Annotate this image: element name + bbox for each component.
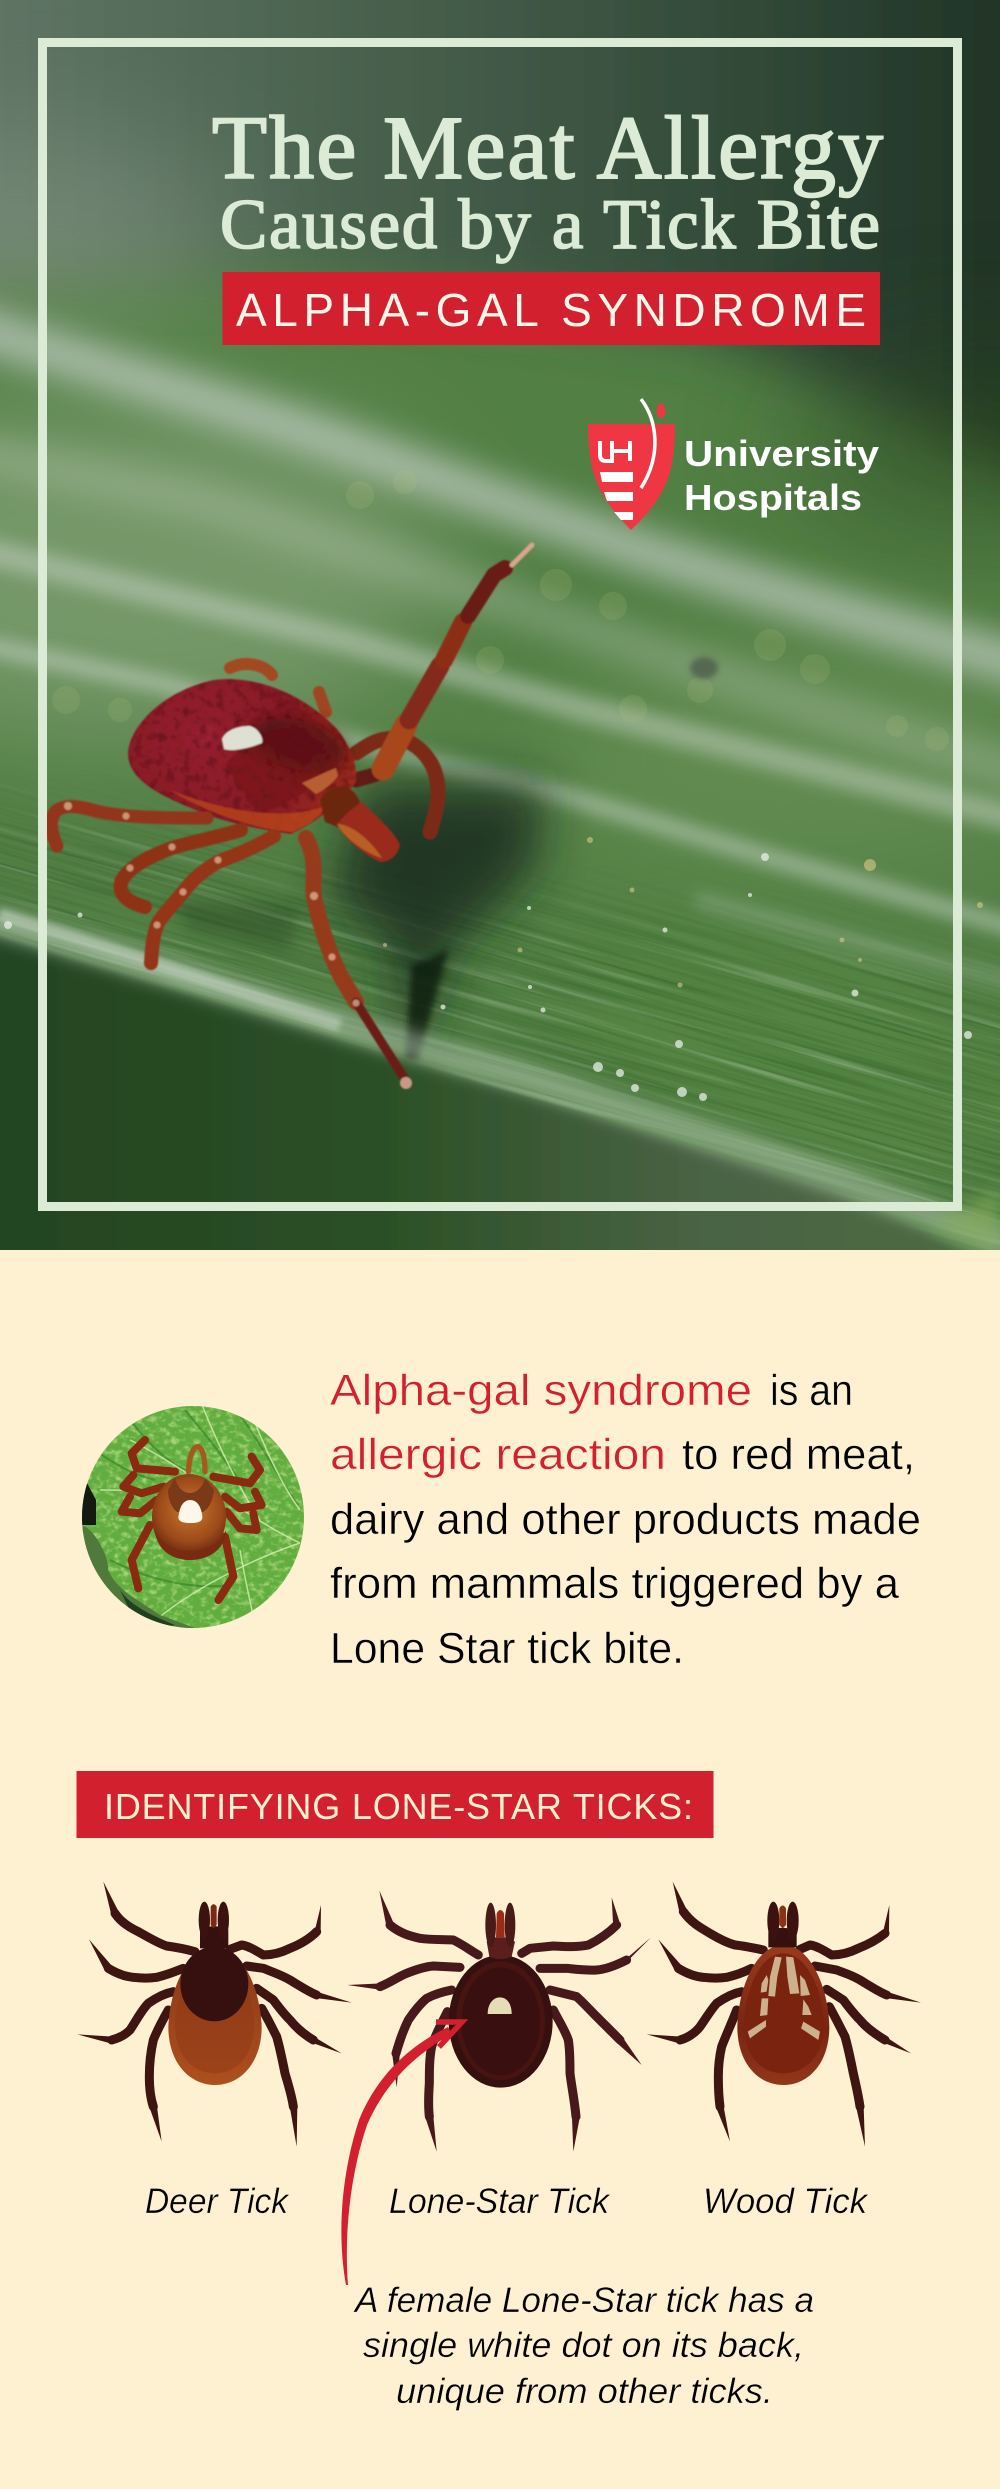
tick body (128, 679, 400, 862)
intro text: Alpha-gal syndrome (330, 1366, 752, 1415)
heading: identifying lone-star ticks: IDENTIFYING LONE-STAR TICKS: (104, 1786, 693, 1827)
callout text: unique from other ticks. (396, 2372, 773, 2411)
callout text: single white dot on its back, (363, 2326, 804, 2365)
pale leaf edge (0, 918, 1000, 1245)
bright corner of leaf (941, 1190, 1000, 1250)
callout text: A female Lone-Star tick has a (353, 2281, 814, 2320)
intro text: Lone Star tick bite. (330, 1624, 684, 1673)
illustration: deer tick (77, 1882, 352, 2147)
leg joints (64, 802, 360, 1006)
tick cast shadow (170, 785, 545, 1060)
illustration: wood tick (647, 1882, 921, 2147)
icon: tick on green leaf circle (82, 1400, 304, 1640)
arrow: callout to white dot (341, 2022, 462, 2285)
front legs of tick (51, 545, 532, 1089)
panel: hero photo of tick on a leaf (0, 0, 1000, 1250)
intro text: allergic reaction (330, 1430, 666, 1479)
dark background below leaf (0, 930, 985, 1260)
circle tick legs (122, 1440, 262, 1600)
intro text: is an (770, 1366, 853, 1415)
callout text (353, 2281, 814, 2411)
tick labels: Deer Tick (145, 2182, 289, 2221)
heading: identifying lone-star ticks (76, 1771, 714, 1838)
banner: Alpha-gal syndrome (222, 272, 880, 345)
bokeh and droplets (4, 470, 983, 1101)
title (212, 99, 883, 264)
intro text: from mammals triggered by a (330, 1559, 900, 1608)
intro text (330, 1366, 921, 1673)
logo: University Hospitals: University (684, 433, 879, 474)
illustration: lone-star tick (347, 1891, 651, 2152)
intro text: to red meat, (682, 1430, 915, 1479)
tick labels: Lone-Star Tick (389, 2182, 610, 2221)
back legs of tick (230, 664, 438, 832)
blurred pale leaf bands (0, 323, 1000, 990)
title: Caused by a Tick Bite (220, 186, 880, 264)
banner: Alpha-gal syndrome: ALPHA-GAL SYNDROME (236, 284, 866, 336)
logo: University Hospitals: Hospitals (684, 477, 862, 518)
tick illustration in photo (51, 545, 532, 1089)
intro text: dairy and other products made (330, 1495, 921, 1544)
tick labels: Wood Tick (703, 2182, 868, 2221)
leaf lower texture (0, 822, 1000, 1244)
logo: University Hospitals (588, 399, 879, 530)
photo frame (42, 42, 958, 1206)
tick labels (145, 2182, 868, 2221)
title: The Meat Allergy (212, 99, 883, 198)
